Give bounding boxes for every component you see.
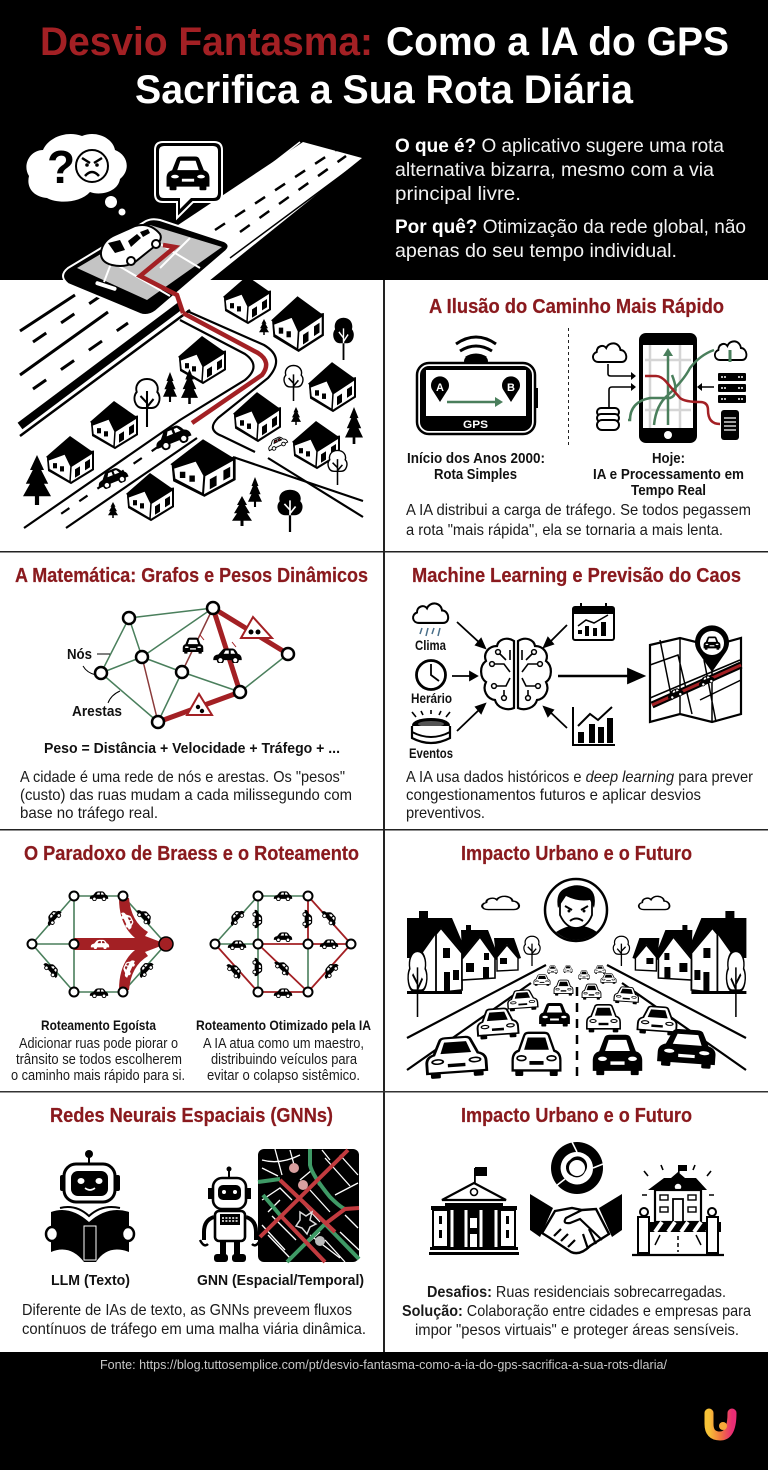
body text: preventivos. — [406, 805, 485, 822]
title: Desvio Fantasma: — [40, 20, 373, 64]
caption: selfish routing: trânsito se todos escolherem — [16, 1051, 182, 1068]
caption: selfish routing: o caminho mais rápido para si. — [11, 1067, 185, 1084]
icon: handshake — [530, 1194, 622, 1253]
caption: selfish routing: Adicionar ruas pode piorar o — [19, 1035, 178, 1052]
labels: LLM (Texto) — [51, 1272, 130, 1289]
formula: Peso = Distância + Velocidade + Tráfego + ... — [44, 740, 340, 757]
panel: Machine Learning e Previsão do Caos — [406, 564, 754, 822]
cars on local road — [95, 421, 288, 491]
panel: Impacto Urbano e o Futuro (collaboration) — [402, 1104, 751, 1339]
body text — [20, 769, 352, 822]
caption: selfish routing: Roteamento Egoísta — [41, 1017, 156, 1033]
icon: government building — [429, 1167, 519, 1255]
old GPS caption: Rota Simples — [434, 466, 517, 483]
caption: selfish routing — [11, 1017, 185, 1084]
intro text: principal livre. — [395, 183, 521, 205]
caption: optimized routing: Roteamento Otimizado pela IA — [196, 1017, 371, 1033]
body text: impor "pesos virtuais" e proteger áreas sensíveis. — [415, 1322, 739, 1339]
caption: optimized routing: evitar o colapso sistêmico. — [207, 1067, 360, 1084]
houses — [46, 276, 356, 520]
icon: clock: Herário — [411, 690, 452, 706]
icon: GPS device: GPS — [463, 419, 488, 431]
traffic jam cars — [425, 965, 716, 1079]
local roads — [24, 311, 363, 528]
body text — [406, 769, 754, 822]
panel: A Ilusão do Caminho Mais Rápido — [406, 295, 751, 539]
labels: GNN (Espacial/Temporal) — [197, 1272, 364, 1289]
houses and trees, right side — [613, 911, 746, 1017]
title — [40, 20, 729, 112]
icon: GPS device: B — [507, 382, 515, 394]
source footer: Fonte: https://blog.tuttosemplice.com/pt/desvio-fantasma-como-a-ia-do-gps-sacrifica-a-sua-rots-dlaria/ — [100, 1358, 668, 1372]
body text — [22, 1302, 366, 1338]
icon: angry driver — [545, 879, 607, 941]
title: Sacrifica a Sua Rota Diária — [135, 68, 634, 112]
body text: a rota "mais rápida", ela se tornaria a mais lenta. — [406, 522, 723, 539]
body text — [406, 502, 751, 539]
icon: growth chart — [573, 707, 615, 745]
trees — [23, 318, 363, 532]
network: AI optimized routing — [210, 891, 356, 998]
heading: Impacto Urbano e o Futuro — [461, 1104, 692, 1127]
thought bubble — [26, 134, 127, 216]
icon: smartphone with AI data flows — [593, 333, 746, 443]
old GPS caption: Início dos Anos 2000: — [407, 450, 545, 467]
network: selfish routing — [28, 891, 173, 998]
icon: GPS device: A — [436, 382, 444, 394]
dashed divider — [568, 328, 570, 447]
highway — [20, 142, 362, 436]
white car on phone — [101, 225, 161, 266]
brand logo — [709, 1413, 732, 1436]
body text: congestionamentos futuros e aplicar desvios — [406, 787, 701, 804]
body text: (custo) das ruas mudam a cada milissegundo com — [20, 787, 352, 804]
body text: contínuos de tráfego em uma malha viária dinâmica. — [22, 1321, 366, 1338]
title: Como a IA do GPS — [386, 20, 729, 64]
icon: GNN robot — [200, 1166, 260, 1262]
icon: GPS device — [417, 337, 538, 434]
caption: optimized routing: distribuindo veículos para — [211, 1051, 358, 1068]
caption: optimized routing — [196, 1017, 371, 1084]
icon: protected school and barrier — [632, 1165, 724, 1255]
route on phone — [140, 245, 183, 313]
panel: Impacto Urbano e o Futuro (traffic scene) — [407, 842, 746, 1079]
icon: robot reading a book — [46, 1150, 134, 1262]
heading: A Matemática: Grafos e Pesos Dinâmicos — [15, 564, 368, 587]
map: traffic on street mesh — [258, 1149, 359, 1262]
today caption: Tempo Real — [631, 482, 706, 499]
icon: clock — [411, 660, 452, 706]
intro text: O que é? O aplicativo sugere uma rota — [395, 135, 724, 157]
icon: stadium — [409, 710, 453, 761]
panel: O Paradoxo de Braess e o Roteamento — [11, 842, 371, 1084]
body text: A IA distribui a carga de tráfego. Se todos pegassem — [406, 502, 751, 519]
body text: A IA usa dados históricos e deep learning para prever — [406, 769, 754, 786]
intro text: Por quê? Otimização da rede global, não — [395, 216, 746, 238]
label: Nós — [67, 646, 110, 675]
label: Arestas: Arestas — [72, 703, 122, 720]
icon: ring logo — [551, 1142, 603, 1194]
icon: map with pin — [650, 625, 741, 722]
panel: Redes Neurais Espaciais (GNNs) — [22, 1104, 366, 1338]
intro text: apenas do seu tempo individual. — [395, 240, 677, 262]
intro text: alternativa bizarra, mesmo com a via — [395, 159, 714, 181]
today caption — [593, 450, 744, 499]
body text: Diferente de IAs de texto, as GNNs preveem fluxos — [22, 1302, 352, 1319]
icon: stadium: Eventos — [409, 745, 453, 761]
arrows into and out of the brain — [452, 622, 644, 731]
body text: Desafios: Ruas residenciais sobrecarregadas. — [427, 1284, 726, 1301]
heading: Redes Neurais Espaciais (GNNs) — [50, 1104, 333, 1127]
speech bubble with car — [155, 142, 222, 218]
clouds — [482, 896, 670, 910]
houses and trees, left side — [407, 911, 540, 1017]
heading: A Ilusão do Caminho Mais Rápido — [429, 295, 724, 318]
graph of nodes and edges — [95, 602, 294, 728]
icon: calendar chart — [573, 603, 614, 640]
icon: weather — [413, 603, 448, 653]
thought bubble: ? — [47, 141, 75, 193]
today caption: IA e Processamento em — [593, 466, 744, 483]
red route — [183, 313, 266, 423]
old GPS caption — [407, 450, 545, 483]
intro text — [395, 135, 746, 262]
label: Arestas — [72, 691, 122, 720]
today caption: Hoje: — [652, 450, 685, 467]
phone — [63, 219, 229, 315]
caption: optimized routing: A IA atua como um maestro, — [203, 1035, 364, 1052]
panel: A Matemática: Grafos e Pesos Dinâmicos — [15, 564, 368, 822]
body text — [402, 1284, 751, 1339]
heading: Impacto Urbano e o Futuro — [461, 842, 692, 865]
road lines — [407, 965, 746, 1078]
icon: weather: Clima — [415, 637, 446, 653]
body text: base no tráfego real. — [20, 805, 158, 822]
heading: O Paradoxo de Braess e o Roteamento — [24, 842, 359, 865]
label: Nós: Nós — [67, 646, 92, 663]
hero illustration: highway, phone and neighbourhood — [20, 134, 363, 532]
labels — [51, 1272, 364, 1289]
panels background — [0, 280, 768, 1352]
body text: A cidade é uma rede de nós e arestas. Os "pesos" — [20, 769, 345, 786]
icon: brain — [481, 639, 551, 709]
